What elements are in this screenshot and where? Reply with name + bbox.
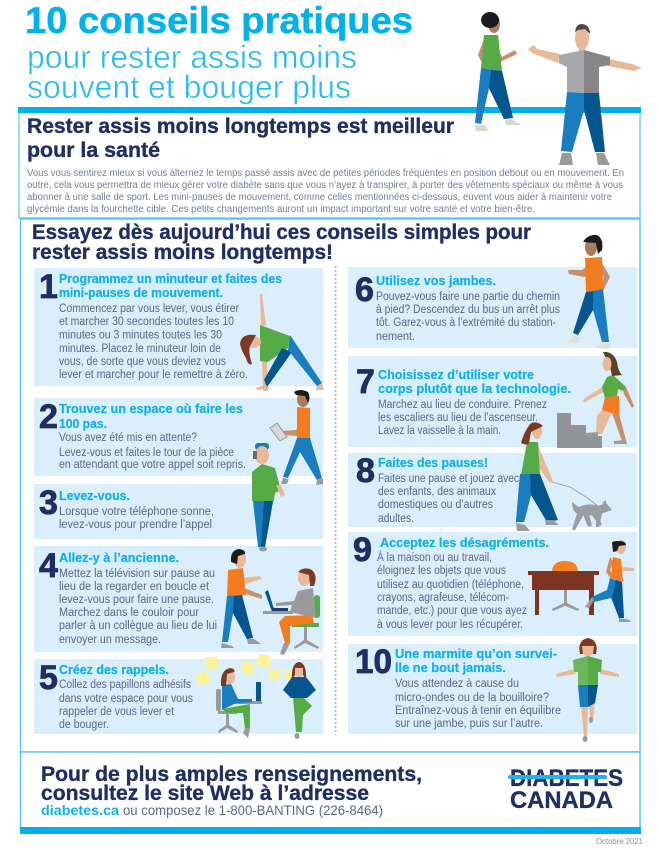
panel: tip 10: Entraînez-vous à tenir en équilibre xyxy=(395,705,561,717)
panel: tip 3: Lorsque votre téléphone sonne, xyxy=(59,506,214,518)
panel: tip 7 xyxy=(348,356,637,447)
figure: man stretching, top xyxy=(528,24,642,165)
panel: tip 10: Une marmite qu’on survei- xyxy=(395,647,557,661)
intro paragraph: glycémie dans la fourchette cible. Ces petits changements auront un impact important sur votre santé et votre bien-être. xyxy=(27,204,535,215)
panel: tip 10: lle ne bout jamais. xyxy=(395,661,506,675)
figure: woman balancing, tip 10 xyxy=(556,638,619,742)
intro paragraph: Vous vous sentirez mieux si vous alternez le temps passé assis avec de petites périodes fréquentes en position debout ou en mouvement. En xyxy=(27,168,624,179)
panel: tip 6 xyxy=(348,267,637,348)
panel: tip 7: Choisissez d’utiliser votre xyxy=(378,368,534,382)
figure: woman walking, top xyxy=(475,12,521,131)
panel: tip 6: à pied? Descendez du bus un arrêt plus xyxy=(376,304,560,316)
panel: tip 7: Marchez au lieu de conduire. Prenez xyxy=(378,399,547,411)
panel: tip 1: et marcher 30 secondes toutes les 10 xyxy=(59,316,234,328)
panel: tip 8: 8 xyxy=(356,452,375,490)
panel: tip 6: 6 xyxy=(355,271,374,309)
title: 10 conseils pratiques xyxy=(25,0,413,41)
panel: tip 5: dans votre espace pour vous xyxy=(59,693,193,705)
panel: tip 4: Marchez dans le couloir pour xyxy=(59,607,199,619)
panel: tip 5: de bouger. xyxy=(59,719,109,731)
figure: desk with chair and runner, tip 9 xyxy=(528,540,634,622)
panel: intro box xyxy=(18,107,641,218)
logo: Diabetes Canada xyxy=(508,765,623,814)
panel: tip 3: levez-vous pour prendre l’appel xyxy=(59,519,212,531)
panel: tip 5: rappeler de vous lever et xyxy=(59,706,175,718)
logo: Diabetes Canada: DIABETES xyxy=(510,765,623,792)
panel: tip 1: lever et marcher pour le remettre à zéro. xyxy=(59,369,248,381)
figure: woman at laptop xyxy=(263,568,320,655)
panel: tip 5 xyxy=(34,659,323,734)
panel: tip 3: Levez-vous. xyxy=(59,489,130,503)
panel: tip 8 xyxy=(348,452,637,527)
figure: man on phone xyxy=(252,443,285,552)
panel: tip 1: Programmez un minuteur et faites des xyxy=(59,272,282,286)
panel: tip 6: nement. xyxy=(376,331,415,343)
panel: tip 1 xyxy=(34,268,323,386)
panel: tip 2: Levez-vous et faites le tour de la pièce xyxy=(59,447,234,459)
title: pour rester assis moins xyxy=(27,39,357,75)
panel: tip 7: corps plutôt que la technologie. xyxy=(378,382,571,396)
panel: tip 2: Trouvez un espace où faire les xyxy=(59,402,243,416)
date: Octobre 2021 xyxy=(596,837,644,846)
panel: tip 5: Créez des rappels. xyxy=(59,663,169,677)
panel: tip 9: crayons, agrafeuse, télécom- xyxy=(377,592,509,604)
panel: tip 4: Allez-y à l’ancienne. xyxy=(59,551,179,565)
intro paragraph: outre, cela vous permettra de mieux gérer votre diabète sans que vous n’ayez à transpirer, à porter des vêtements spéciaux ou même à vous xyxy=(27,180,623,191)
panel: tip 1: vous, de sorte que vous deviez vous xyxy=(59,356,226,368)
footer text xyxy=(41,763,422,818)
footer text: ou composez le 1-800-BANTING (226-8464) xyxy=(123,802,383,818)
panel: tip 4 xyxy=(34,546,323,652)
panel: tip 4: 4 xyxy=(39,547,58,585)
figure: man walking with tablet xyxy=(270,390,323,485)
panel: tip 7: 7 xyxy=(356,363,375,401)
panel: tip 1: minutes ou 3 minutes toutes les 30 xyxy=(59,330,222,342)
panel: tip 9: éloignez les objets que vous xyxy=(377,565,506,577)
panel: tip 4: parler à un collègue au lieu de lui xyxy=(59,620,217,632)
panel: tip 9: utilisez au quotidien (téléphone, xyxy=(377,579,524,591)
panel: tip 9: 9 xyxy=(353,531,372,569)
title: souvent et bouger plus xyxy=(27,69,351,105)
figure: woman walking dog, tip 8 xyxy=(516,422,612,531)
panel: tip 2 xyxy=(34,398,323,476)
panel: tip 8: domestiques ou d’autres xyxy=(378,499,493,511)
panel: tip 9: Acceptez les désagréments. xyxy=(380,536,549,550)
figure: triangle stretch xyxy=(240,294,324,391)
panel: tip 5: Collez des papillons adhésifs xyxy=(59,679,191,691)
panel: tip 7: les escaliers au lieu de l’ascenseur. xyxy=(378,412,538,424)
logo: Diabetes Canada: CANADA xyxy=(510,787,613,814)
panel: tip 2: 100 pas. xyxy=(59,417,107,431)
panel: tip 6: tôt. Garez-vous à l’extrémité du station- xyxy=(376,317,556,329)
panel: tip 1: minutes. Placez le minuteur loin de xyxy=(59,343,221,355)
panel: tip 3 xyxy=(34,484,323,539)
panel: tip 4: envoyer un message. xyxy=(59,634,161,646)
panel: tip 9: à vous lever pour les récupérer. xyxy=(377,619,523,631)
footer text: Pour de plus amples renseignements, xyxy=(41,763,422,786)
figure: woman walking, tip 6 xyxy=(566,235,610,349)
panel: tip 1: Commencez par vous lever, vous étirer xyxy=(59,303,239,315)
panel: tip 10: micro-ondes ou de la bouilloire? xyxy=(395,692,549,704)
panel: tip 10 xyxy=(348,643,637,734)
panel: tip 2: en attendant que votre appel soit repris. xyxy=(59,459,246,471)
heading: tips: Essayez dès aujourd’hui ces conseils simples pour xyxy=(32,221,531,244)
panel: tip 4: levez-vous pour faire une pause. xyxy=(59,594,214,606)
panel: tip 3: 3 xyxy=(39,484,58,522)
panel: tip 10: Vous attendez à cause du xyxy=(395,678,519,690)
icon: dog xyxy=(572,500,612,530)
icon: sticky notes xyxy=(195,654,294,686)
panel: tip 4: lieu de la regarder en boucle et xyxy=(59,581,210,593)
panel: tip 6: Pouvez-vous faire une partie du chemin xyxy=(376,291,560,303)
panel: tip 2: Vous avez été mis en attente? xyxy=(59,432,197,444)
panel: tip 2: 2 xyxy=(39,398,58,436)
figure: colleague standing xyxy=(221,549,262,648)
panel: tip 1: 1 xyxy=(39,268,58,306)
intro paragraph xyxy=(27,168,624,215)
figure: woman at computer xyxy=(216,668,262,738)
panel: tip 10: sur une jambe, puis sur l’autre. xyxy=(395,718,543,730)
panel: tip 5: 5 xyxy=(39,659,58,697)
panel: tip 1: mini-pauses de mouvement. xyxy=(59,286,223,300)
heading: intro xyxy=(27,115,454,162)
panel: footer xyxy=(20,752,641,834)
heading: intro: pour la santé xyxy=(27,139,160,162)
panel: tips box xyxy=(20,219,640,752)
figure: stairs and woman climbing, tip 7 xyxy=(557,352,634,448)
heading: tips: rester assis moins longtemps! xyxy=(32,241,333,264)
title xyxy=(25,0,413,105)
panel: tip 9 xyxy=(348,531,637,636)
panel: tip 6: Utilisez vos jambes. xyxy=(376,274,496,288)
panel: tip 7: Lavez la vaisselle à la main. xyxy=(378,425,501,437)
footer text: consultez le site Web à l’adresse xyxy=(41,782,369,805)
heading: tips xyxy=(32,221,531,264)
panel: tip 9: À la maison ou au travail, xyxy=(377,551,492,564)
panel: tip 4: Mettez la télévision sur pause au xyxy=(59,568,215,580)
panel: tip 8: adultes. xyxy=(378,513,414,525)
intro paragraph: abonner à une salle de sport. Les mini-pauses de mouvement, comme celles mentionnées ci-dessous, euvent vous aider à maintenir votre xyxy=(27,192,612,203)
heading: intro: Rester assis moins longtemps est meilleur xyxy=(27,115,454,138)
panel: tip 10: 10 xyxy=(355,643,392,681)
panel: tip 8: Faites une pause et jouez avec xyxy=(378,473,519,485)
figure: woman standing on one leg xyxy=(283,662,316,739)
panel: tip 8: des enfants, des animaux xyxy=(378,486,496,498)
panel: tip 8: Faites des pauses! xyxy=(378,456,488,470)
footer text: diabetes.ca xyxy=(41,802,119,818)
panel: tip 9: mande, etc.) pour que vous ayez xyxy=(377,605,527,617)
